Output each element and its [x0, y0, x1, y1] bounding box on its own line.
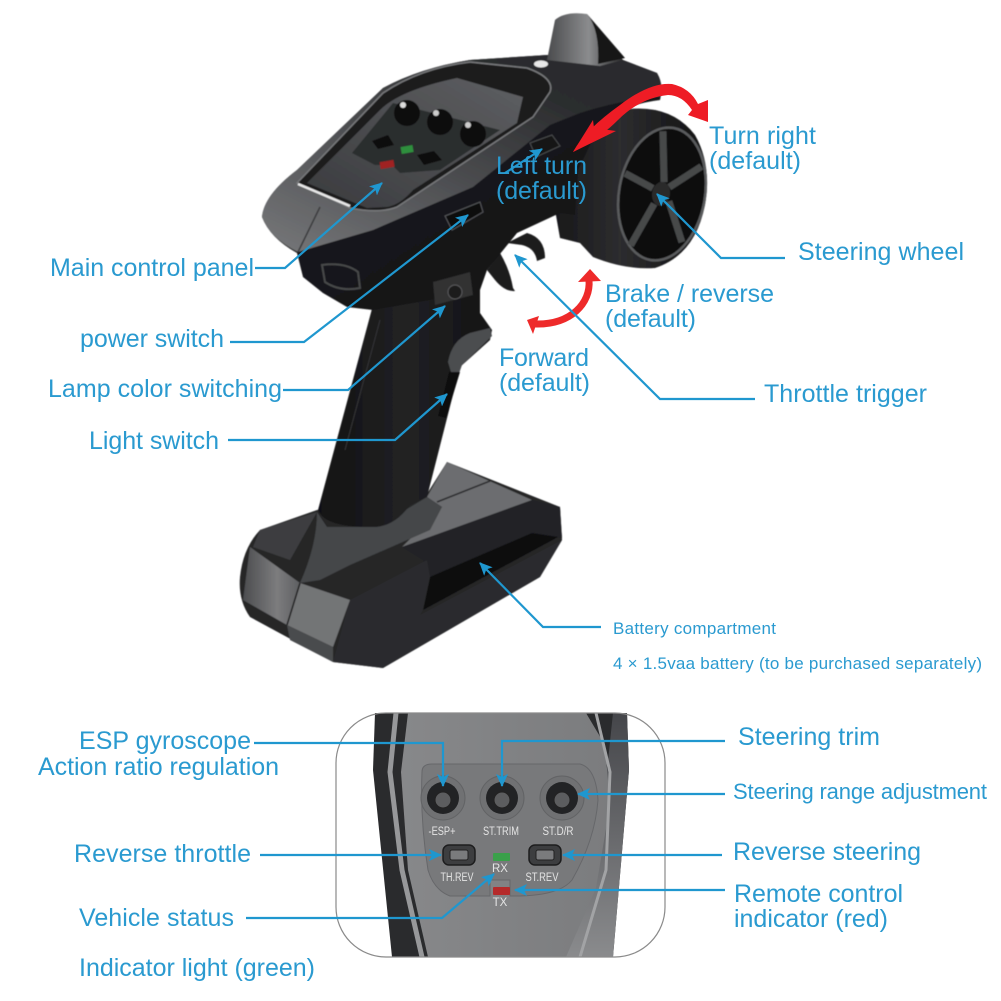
label: steering wheel: Steering wheel — [798, 238, 964, 266]
label: indicator light: Indicator light (green) — [79, 954, 315, 982]
detail panel labels — [428, 826, 574, 909]
base / battery housing — [240, 462, 562, 668]
label: lamp color switching — [48, 306, 445, 403]
trigger — [487, 233, 545, 291]
label: power switch — [80, 215, 468, 353]
label: main control panel: Main control panel — [50, 254, 254, 282]
mini switches and lights — [372, 135, 442, 169]
label: battery compartment — [480, 563, 982, 673]
status lights — [493, 853, 510, 895]
label: steering trim — [502, 723, 880, 786]
label: forward — [499, 344, 590, 397]
panel detail close-up — [336, 713, 665, 957]
label: left turn: Left turn — [496, 152, 587, 180]
detail panel labels: TX — [493, 897, 508, 909]
label: forward: Forward — [499, 344, 589, 372]
lamp switch collar — [433, 272, 473, 305]
red steering arrow — [573, 84, 708, 152]
wheel rim — [608, 121, 716, 267]
detail panel labels: -ESP+ — [428, 826, 456, 838]
label: steering wheel — [657, 194, 964, 266]
detail panel labels: ST.REV — [526, 872, 559, 884]
detail switches — [443, 845, 561, 865]
label: vehicle status: Vehicle status — [79, 904, 234, 932]
label: throttle trigger: Throttle trigger — [764, 380, 927, 408]
detail panel labels: ST.TRIM — [483, 826, 519, 838]
detail panel labels: RX — [492, 863, 508, 875]
label: left turn — [496, 149, 587, 205]
detail knobs — [421, 776, 584, 820]
label: steering trim: Steering trim — [738, 723, 880, 751]
label: lamp color switching: Lamp color switching — [48, 375, 282, 403]
label: light switch: Light switch — [89, 427, 219, 455]
label: power switch: power switch — [80, 325, 224, 353]
label: steering range adjustment: Steering range adjustment — [733, 779, 987, 804]
label: esp gyroscope: Action ratio regulation — [38, 753, 279, 781]
label: turn right: Turn right — [709, 122, 816, 150]
label: remote control indicator: indicator (red) — [734, 905, 888, 933]
detail panel labels: TH.REV — [440, 872, 474, 884]
label: brake / reverse: (default) — [605, 305, 696, 333]
label: reverse throttle: Reverse throttle — [74, 840, 251, 868]
label: esp gyroscope — [38, 727, 443, 786]
label: light switch — [89, 394, 447, 455]
wheel — [548, 108, 716, 268]
label: remote control indicator: Remote control — [734, 880, 903, 908]
detail panel labels: ST.D/R — [542, 826, 574, 838]
label: esp gyroscope: ESP gyroscope — [79, 727, 251, 755]
grip — [318, 285, 492, 527]
red throttle arrow — [527, 269, 601, 334]
controller body — [262, 13, 661, 310]
transmitter illustration — [240, 13, 716, 668]
mini knobs — [394, 100, 486, 147]
control panel window — [297, 62, 551, 211]
label: forward: (default) — [499, 369, 590, 397]
label: turn right — [709, 122, 816, 175]
label: brake / reverse: Brake / reverse — [605, 280, 774, 308]
side switches — [445, 135, 560, 230]
label: brake / reverse — [605, 280, 774, 333]
label: vehicle status — [79, 874, 494, 932]
antenna — [534, 13, 625, 68]
label: remote control indicator — [515, 880, 903, 933]
label: throttle trigger — [515, 255, 927, 408]
label: reverse steering: Reverse steering — [733, 838, 921, 866]
label: left turn: (default) — [496, 177, 587, 205]
label: battery compartment: Battery compartment — [613, 619, 776, 638]
label: battery compartment: 4 × 1.5vaa battery (to be purchased separately) — [613, 654, 982, 673]
label: main control panel — [50, 183, 382, 282]
label: turn right: (default) — [709, 147, 801, 175]
